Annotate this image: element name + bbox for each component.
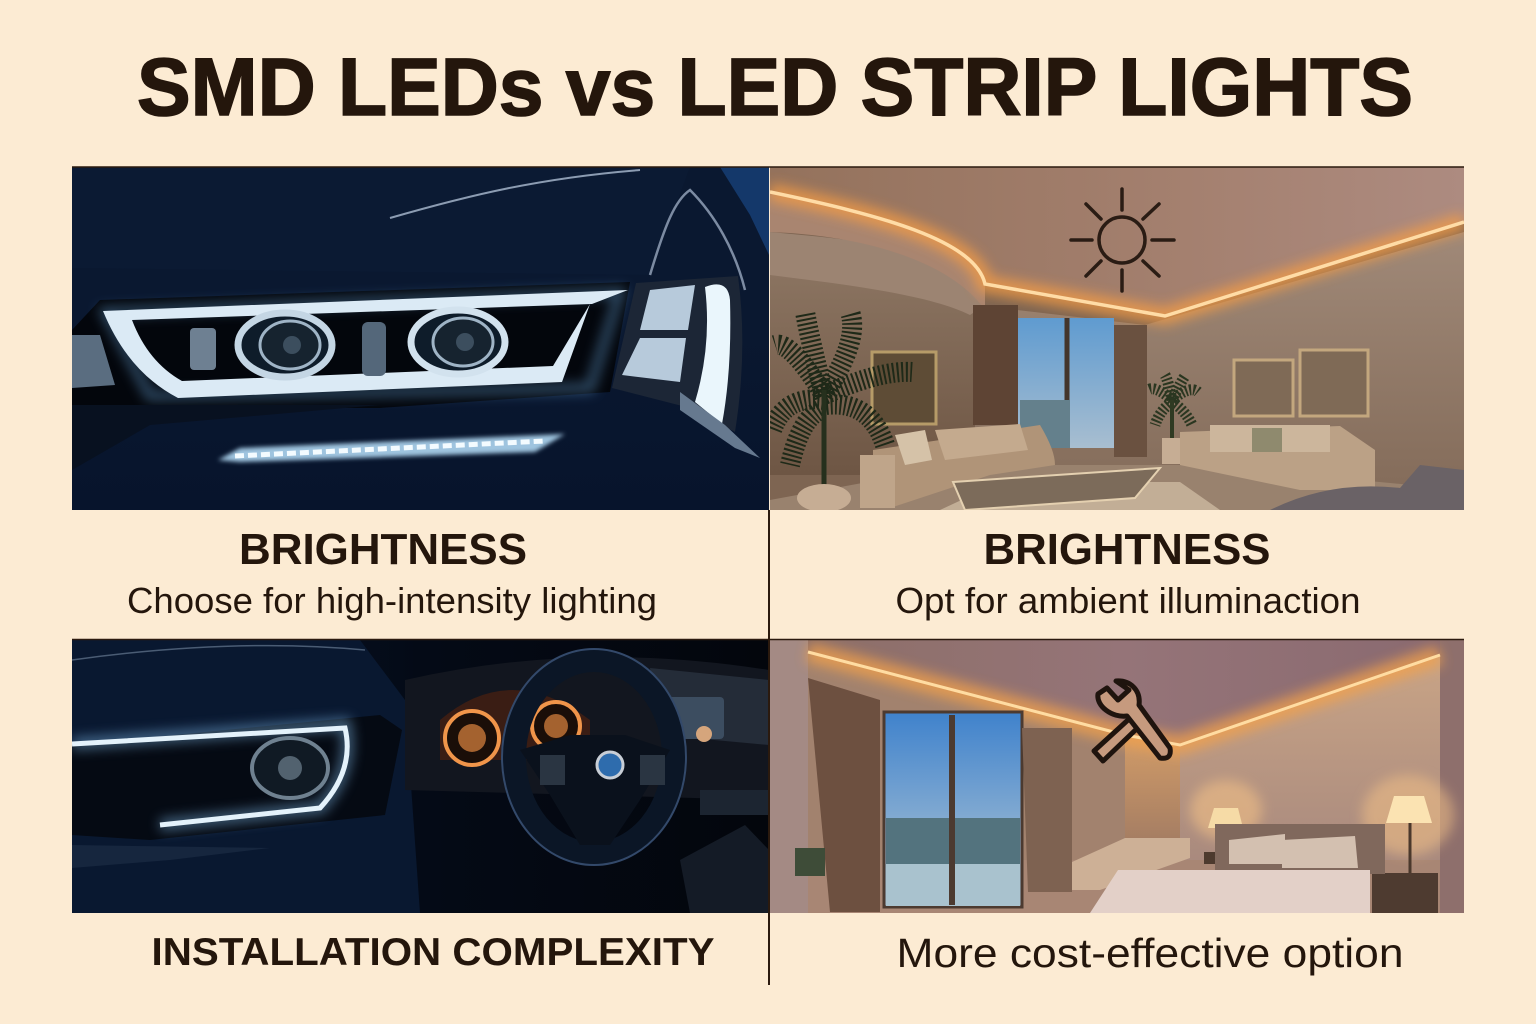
cove lights (808, 652, 1440, 745)
side light (612, 276, 742, 432)
right sofa (1180, 425, 1375, 490)
panel: car interior and headlight photo (72, 640, 769, 913)
title: SMD LEDs vs LED STRIP LIGHTS (137, 42, 1413, 133)
strip light glow (770, 192, 1464, 316)
text: cost-effective option: More cost-effective option (896, 930, 1404, 976)
corner wall (1125, 738, 1180, 838)
bedroom lamps (1190, 775, 1454, 913)
centre and right wall (975, 232, 1464, 490)
dashboard (405, 657, 769, 800)
heading: strip brightness: BRIGHTNESS (984, 525, 1270, 574)
steering wheel (502, 649, 686, 865)
curtains (808, 678, 880, 912)
bed (1090, 824, 1385, 913)
ceiling (770, 167, 1464, 316)
left sofa (860, 424, 1055, 508)
panel: SMD car headlight photo (72, 167, 769, 510)
panel: bedroom photo (770, 640, 1464, 913)
headlight glow (105, 292, 620, 396)
gauges (445, 702, 580, 765)
window and curtains (1018, 318, 1114, 448)
picture frames (1234, 360, 1293, 416)
icon: wrench and screwdriver (1094, 681, 1170, 761)
right wall (1180, 655, 1440, 860)
icon: sun (1071, 189, 1174, 291)
heading: SMD brightness: BRIGHTNESS (239, 525, 527, 574)
text: SMD brightness advice: Choose for high-intensity lighting (127, 580, 657, 621)
palm right (1148, 375, 1198, 440)
divider lines (72, 167, 1464, 985)
heading: installation complexity: INSTALLATION COMPLEXITY (152, 931, 714, 974)
curved soffit (770, 232, 985, 315)
headlight DRL outline (103, 290, 628, 398)
window (884, 712, 1022, 907)
projector lenses (238, 310, 505, 377)
sofa (1072, 838, 1190, 890)
left wall (770, 275, 975, 475)
fog strip light (218, 434, 565, 462)
floor (770, 465, 1464, 510)
table (953, 468, 1160, 510)
ceiling (808, 640, 1440, 745)
bottom-left headlight DRL (72, 724, 347, 825)
text: strip brightness advice: Opt for ambient illuminaction (896, 580, 1360, 621)
palm left (772, 312, 912, 490)
panel: ambient living room photo (770, 167, 1464, 512)
